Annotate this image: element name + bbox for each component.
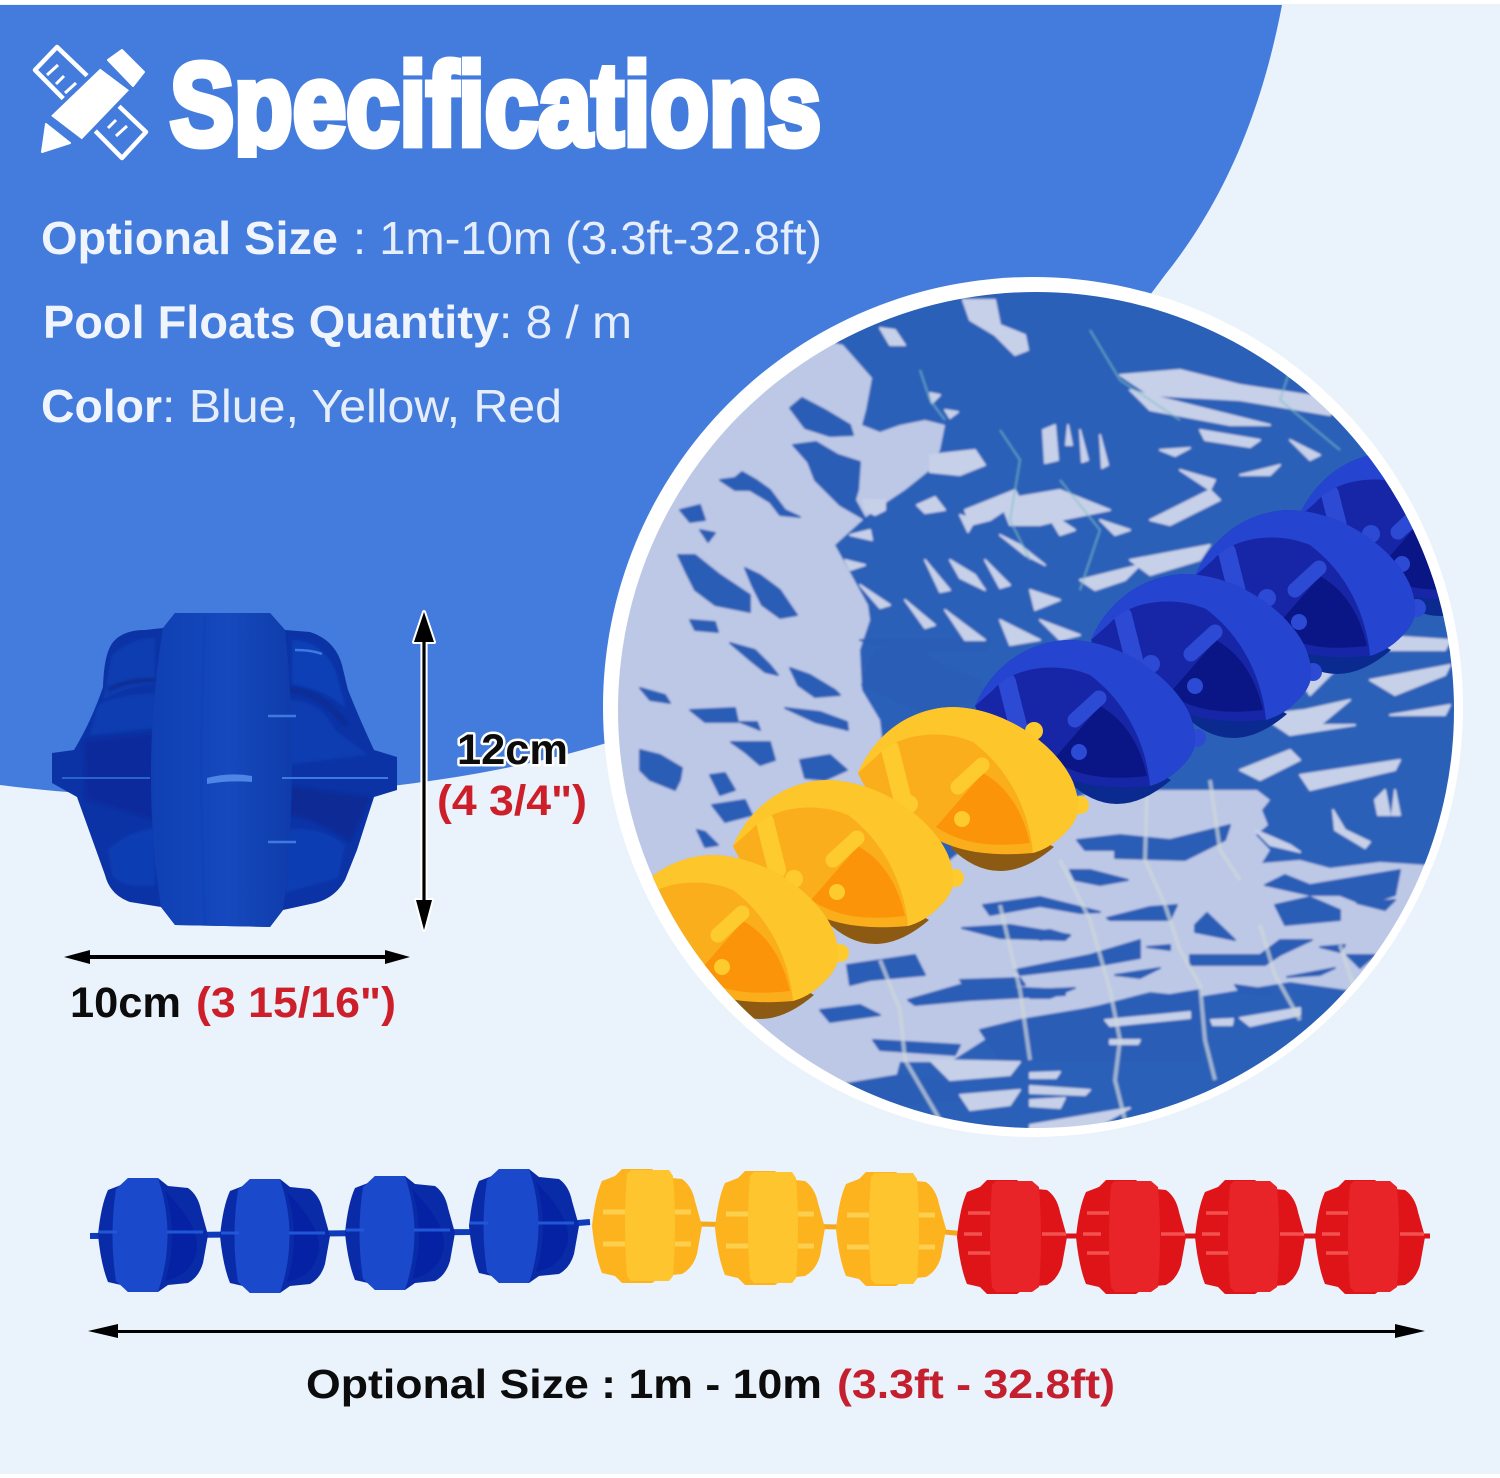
blue header panel <box>0 5 1282 797</box>
arrow: 12cm height <box>414 612 434 930</box>
icon: pencil and ruler <box>35 47 146 158</box>
label: 4 3/4 inch: (4 3/4") <box>437 777 587 825</box>
spec line: pool floats quantity: Pool Floats Quantity <box>43 296 499 348</box>
water surface <box>600 275 1480 1155</box>
spec line: optional size: : 1m-10m (3.3ft-32.8ft) <box>353 212 822 264</box>
red floats row <box>957 1180 1425 1294</box>
yellow floats <box>618 707 1089 1019</box>
spec line: optional size: Optional Size <box>41 212 338 264</box>
large float product image <box>52 613 397 927</box>
axle: yellow <box>700 1224 965 1234</box>
spec line: pool floats quantity: : 8 / m <box>499 296 632 348</box>
blue floats row <box>98 1169 579 1293</box>
blue floats <box>975 456 1444 804</box>
float chain <box>90 1169 1430 1294</box>
arrow: overall length <box>88 1324 1425 1338</box>
label: 10cm: 10cm <box>70 979 181 1027</box>
spec line: color: : Blue, Yellow, Red <box>162 380 562 432</box>
yellow floats row <box>592 1169 946 1286</box>
spec line: color: Color <box>41 380 162 432</box>
label: 3 15/16 inch: (3 15/16") <box>196 979 396 1027</box>
title: Specifications <box>170 39 821 170</box>
spec line: optional size <box>41 212 822 264</box>
label: 12cm: 12cm <box>457 726 568 774</box>
axle: red <box>965 1234 1430 1238</box>
arrow: 10cm width <box>64 950 410 964</box>
label: optional size: Optional Size : 1m - 10m <box>306 1361 822 1407</box>
circular photo ring <box>603 277 1463 1137</box>
circular photo: pool water with lane floats <box>618 292 1454 1128</box>
chain axle <box>90 1222 590 1236</box>
label: length in feet: (3.3ft - 32.8ft) <box>837 1361 1115 1407</box>
